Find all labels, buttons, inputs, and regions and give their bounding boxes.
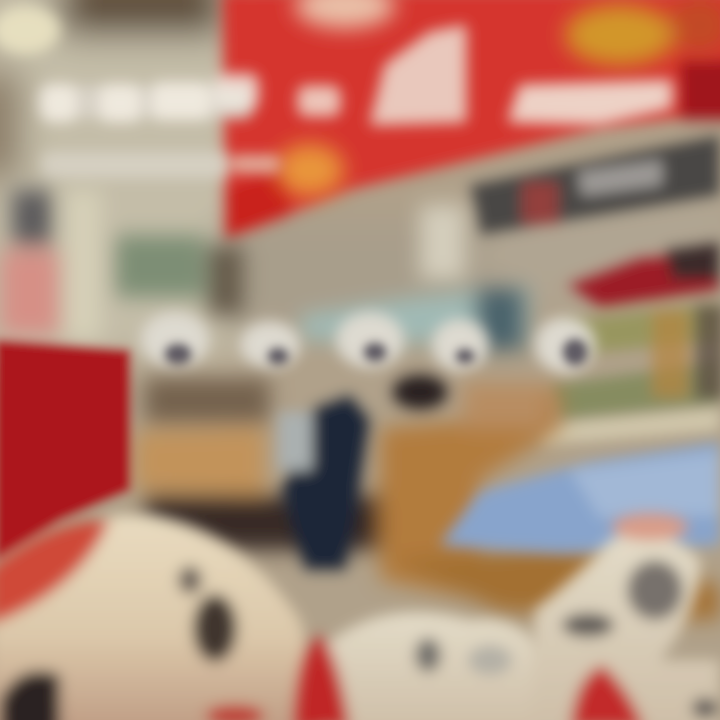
row of hanging round lamps xyxy=(141,312,595,373)
blue floor panel xyxy=(440,442,720,553)
background wall and ceiling xyxy=(0,0,720,360)
shelf and pale pillars xyxy=(0,190,465,340)
smaller white plush toys, bottom xyxy=(207,612,570,720)
ceiling lamp xyxy=(0,6,60,54)
person in dark suit xyxy=(278,374,448,570)
large white plush toy, left xyxy=(0,515,330,720)
headline band, left xyxy=(38,86,253,118)
blurred headline text xyxy=(38,25,672,178)
red block at left xyxy=(0,340,130,560)
second line text xyxy=(42,152,280,178)
headline characters, left xyxy=(42,74,258,122)
dark shelf sign strip xyxy=(470,135,720,235)
right shelves with products xyxy=(540,242,720,445)
wooden counters xyxy=(135,378,720,620)
red banner xyxy=(222,0,720,240)
plush toy, right xyxy=(530,513,720,720)
banner highlights xyxy=(276,0,720,196)
headline characters, on banner xyxy=(298,25,672,125)
teal display xyxy=(300,285,530,350)
